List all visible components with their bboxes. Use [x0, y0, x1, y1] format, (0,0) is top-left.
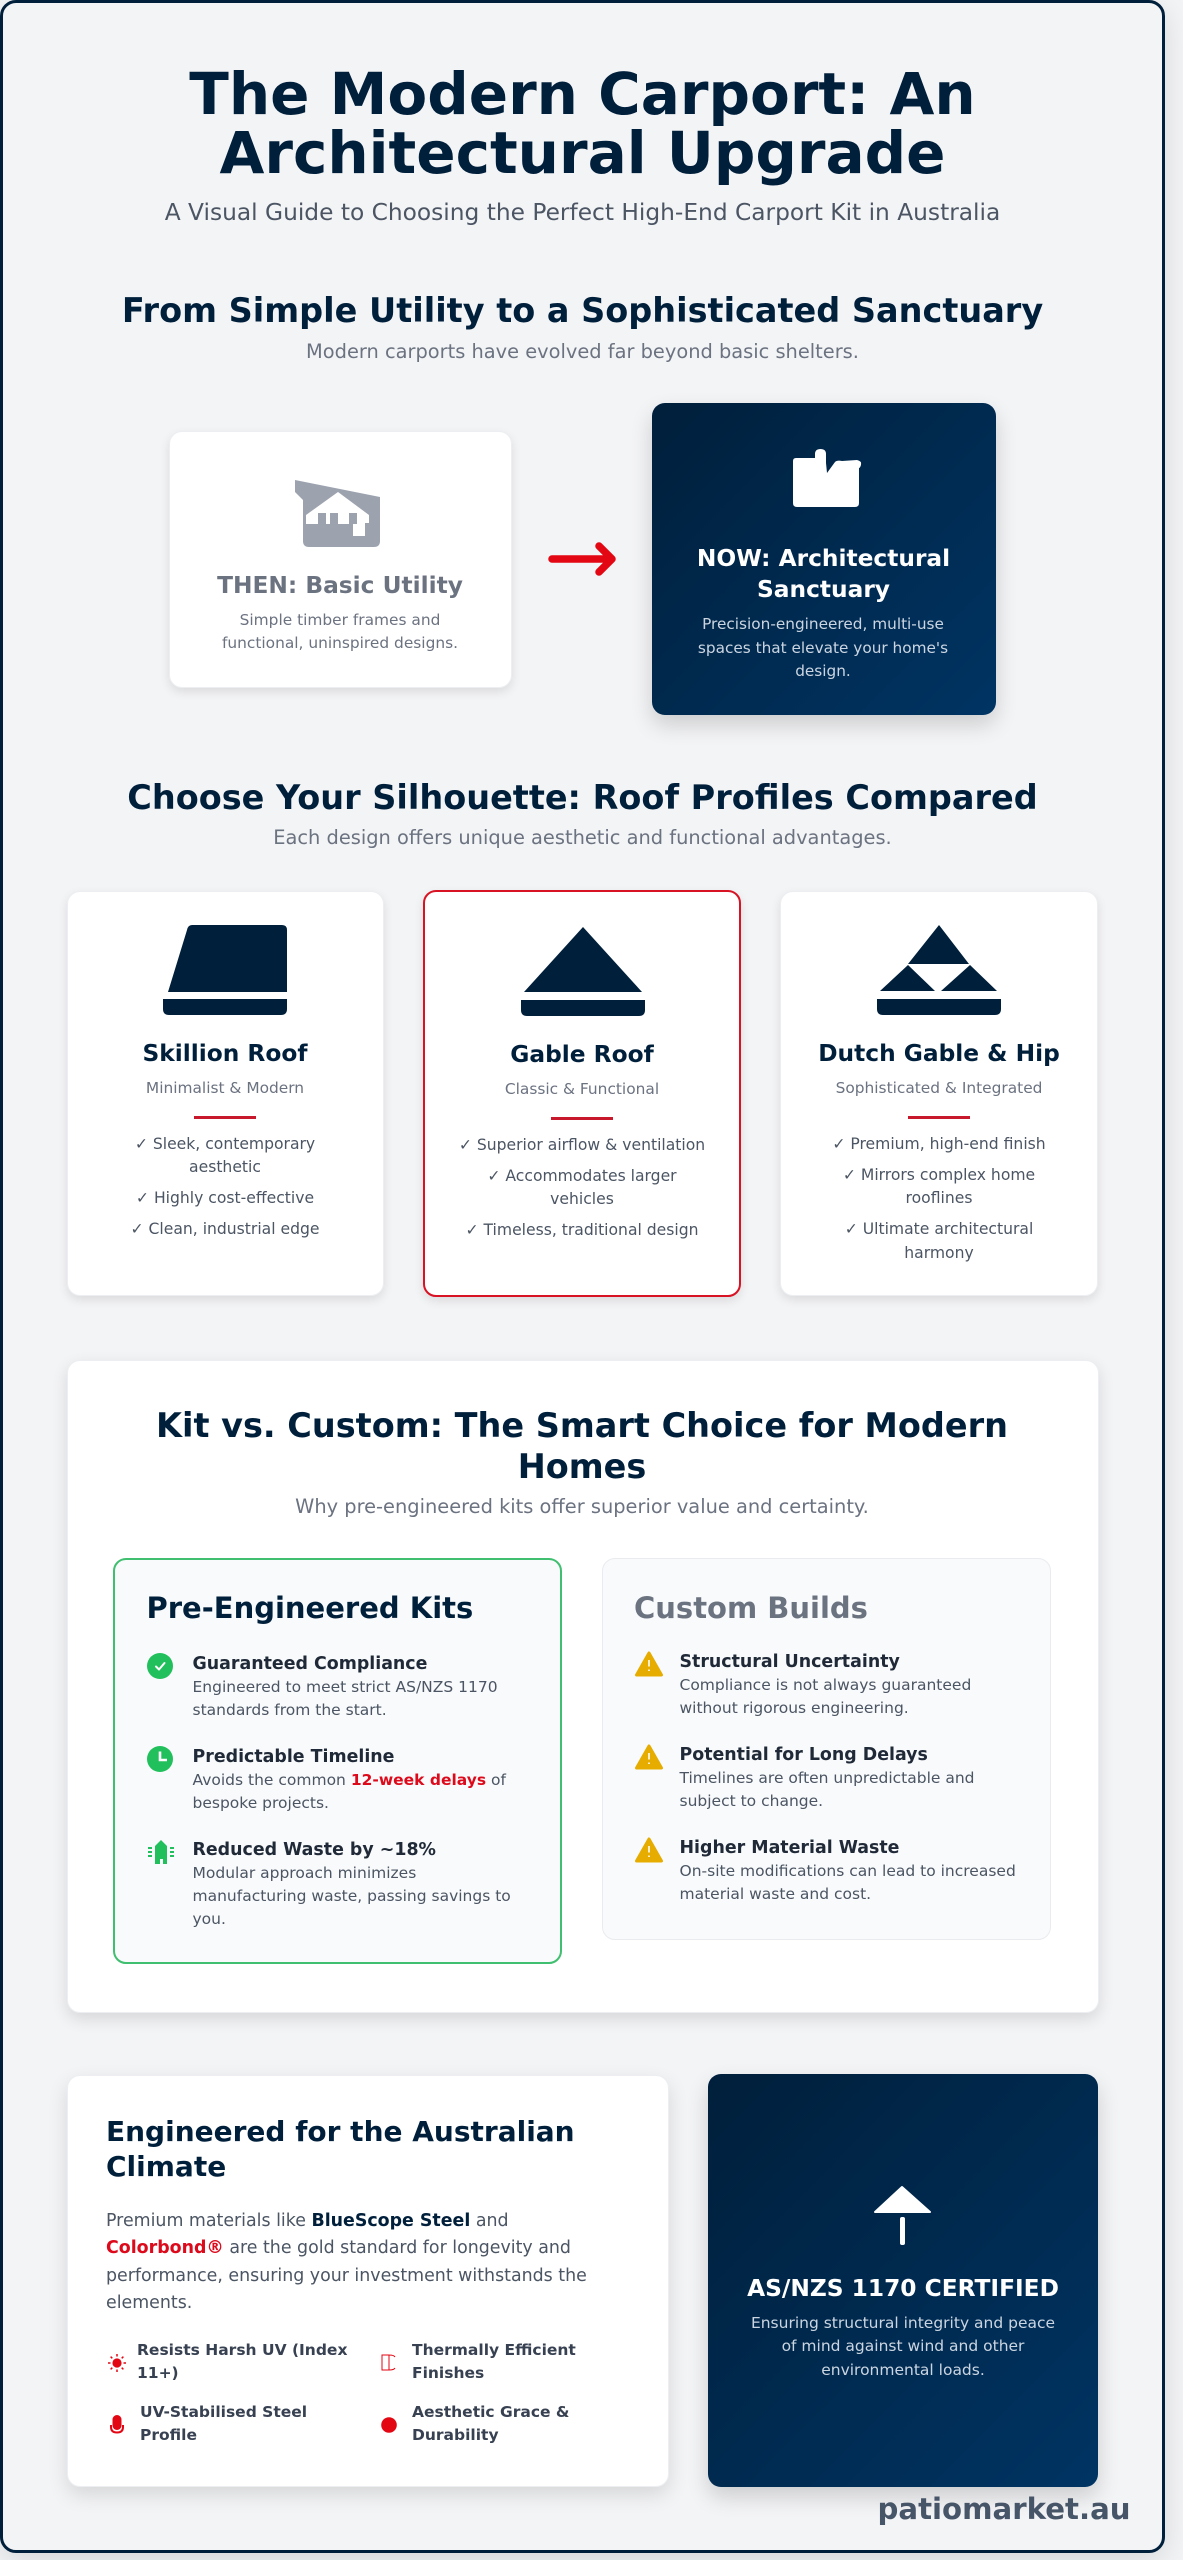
thermal text: Finishes: [412, 2364, 484, 2382]
steel text: Profile: [140, 2426, 197, 2444]
aesthetic text: Durability: [412, 2426, 499, 2444]
waste text: [192, 1864, 511, 1928]
certified description: environmental loads.: [821, 2361, 985, 2379]
gable tagline: Classic & Functional: [505, 1080, 659, 1098]
uncertainty title: Structural Uncertainty: [680, 1652, 900, 1672]
now description: spaces that elevate your home's: [698, 638, 948, 656]
gable title: Gable Roof: [510, 1041, 654, 1068]
skillion benefits: aesthetic ✓ Highly cost-effective ✓ Clean, industrial edge: [130, 1158, 320, 1238]
timeline title: Predictable Timeline: [192, 1746, 394, 1766]
uv text: 11+): [137, 2364, 179, 2382]
dutch benefits: ✓ Premium, high-end finish ✓ Mirrors complex home: [832, 1135, 1046, 1184]
divider: [194, 1116, 256, 1118]
delays text: subject to change.: [680, 1792, 823, 1810]
icon: warning: [635, 1744, 663, 1770]
delays text: Timelines are often unpredictable and: [680, 1768, 974, 1786]
item: waste: [148, 1840, 511, 1928]
dutch benefits: [832, 1135, 1046, 1262]
item: delays: [635, 1744, 974, 1810]
title: Architectural Upgrade: [219, 119, 946, 187]
aesthetic text: Aesthetic Grace &: [412, 2403, 569, 2421]
now description: design.: [795, 662, 851, 680]
waste text: you.: [192, 1910, 226, 1928]
feature: thermal: [382, 2341, 576, 2382]
waste text: Modular approach minimizes: [192, 1864, 416, 1882]
uncertainty text: without rigorous engineering.: [680, 1699, 909, 1717]
section heading: roofs: Choose Your Silhouette: Roof Profiles Compared: [127, 778, 1038, 816]
item: material waste: [635, 1837, 1016, 1903]
then description: functional, uninspired designs.: [222, 634, 458, 652]
climate heading: Climate: [106, 2150, 226, 2182]
dutch title: Dutch Gable & Hip: [818, 1040, 1060, 1067]
climate paragraph: performance, ensuring your investment withstands the: [106, 2266, 587, 2286]
material waste title: Higher Material Waste: [680, 1838, 899, 1858]
custom heading: Custom Builds: [634, 1591, 868, 1625]
divider: [551, 1117, 613, 1120]
icon: warning: [635, 1651, 663, 1676]
icon: gable: [521, 927, 645, 1016]
panel: then card: [168, 431, 512, 688]
panel: skillion roof: [66, 891, 384, 1296]
panel: certification: [708, 2074, 1098, 2487]
thermal text: [412, 2341, 576, 2382]
panel: custom builds: [602, 1558, 1050, 1940]
timeline text: Avoids the common 12-week delays of: [192, 1770, 506, 1788]
icon: basic shelter: [295, 480, 380, 547]
certified description: of mind against wind and other: [782, 2337, 1024, 2355]
icon: dutch gable: [877, 925, 1001, 1015]
compliance title: Guaranteed Compliance: [192, 1654, 427, 1674]
waste title: Reduced Waste by ~18%: [192, 1840, 436, 1860]
delays title: Potential for Long Delays: [680, 1744, 928, 1764]
timeline text: bespoke projects.: [192, 1794, 329, 1812]
steel text: [140, 2401, 307, 2448]
kit heading: Kit vs. Custom: The Smart Choice for Modern: [156, 1406, 1008, 1444]
compliance text: [192, 1678, 498, 1719]
dutch benefits: rooflines ✓ Ultimate architectural: [845, 1189, 1033, 1238]
then description: Simple timber frames and: [240, 611, 440, 629]
icon: warning: [635, 1837, 663, 1862]
subtitle: A Visual Guide to Choosing the Perfect High-End Carport Kit in Australia: [165, 199, 1000, 226]
title: [189, 60, 976, 187]
steel text: UV-Stabilised Steel: [140, 2403, 307, 2421]
feature: aesthetic: [378, 2400, 648, 2450]
feature: steel: [106, 2400, 366, 2450]
panel: dutch gable: [780, 891, 1098, 1296]
waste text: manufacturing waste, passing savings to: [192, 1887, 511, 1905]
gable benefits: ✓ Superior airflow & ventilation ✓ Accommodates larger: [459, 1136, 705, 1185]
panel: pre-engineered kits: [113, 1558, 562, 1964]
uv text: [137, 2341, 348, 2382]
item: uncertainty: [635, 1651, 971, 1717]
climate paragraph: [106, 2211, 587, 2313]
thermal text: Thermally Efficient: [412, 2341, 576, 2359]
dutch benefits: harmony: [904, 1244, 974, 1262]
material waste text: On-site modifications can lead to increased: [680, 1862, 1016, 1880]
then description: [222, 611, 458, 652]
compliance text: Engineered to meet strict AS/NZS 1170: [192, 1678, 498, 1696]
section subheading: evolution: Modern carports have evolved far beyond basic shelters.: [306, 340, 859, 363]
skillion tagline: Minimalist & Modern: [146, 1079, 304, 1097]
uncertainty text: Compliance is not always guaranteed: [680, 1676, 971, 1694]
divider: [908, 1116, 970, 1118]
certified description: [708, 2312, 1098, 2382]
pre-engineered heading: Pre-Engineered Kits: [146, 1591, 473, 1625]
kit heading: Homes: [518, 1446, 646, 1486]
dutch tagline: Sophisticated & Integrated: [836, 1079, 1042, 1097]
section subheading: roofs: Each design offers unique aesthetic and functional advantages.: [273, 826, 892, 849]
icon: thermal: [382, 2354, 396, 2370]
item: timeline: [147, 1746, 506, 1812]
skillion title: Skillion Roof: [142, 1040, 308, 1067]
title: The Modern Carport: An: [189, 60, 976, 128]
icon: modular house: [148, 1840, 174, 1864]
climate paragraph: Colorbond® are the gold standard for longevity and: [106, 2238, 571, 2258]
uv text: Resists Harsh UV (Index: [137, 2341, 347, 2359]
icon: sun: [108, 2354, 126, 2372]
climate paragraph: elements.: [106, 2293, 192, 2313]
icon: check: [147, 1653, 173, 1679]
skillion benefits: ✓ Sleek, contemporary: [135, 1135, 315, 1153]
icon: certified shelter: [873, 2185, 933, 2247]
icon: modern shelter: [793, 449, 862, 507]
section heading: evolution: From Simple Utility to a Sophisticated Sanctuary: [122, 291, 1043, 330]
panel: gable roof: [423, 890, 741, 1297]
now description: [698, 615, 948, 680]
certified description: Ensuring structural integrity and peace: [751, 2314, 1055, 2332]
now heading: [697, 545, 950, 603]
icon: microphone: [108, 2414, 126, 2436]
arrow: then to now: [548, 542, 616, 576]
item: compliance: [147, 1653, 498, 1719]
timeline text: [192, 1770, 506, 1812]
compliance text: standards from the start.: [192, 1701, 387, 1719]
material waste text: material waste and cost.: [680, 1885, 871, 1903]
panel: now card: [652, 403, 996, 715]
brand footer: patiomarket.au: [878, 2492, 1131, 2526]
kit heading: [156, 1406, 1008, 1486]
feature: uv: [108, 2341, 348, 2382]
gable benefits: vehicles ✓ Timeless, traditional design: [465, 1190, 699, 1239]
then heading: THEN: Basic Utility: [217, 572, 463, 599]
climate paragraph: Premium materials like BlueScope Steel and: [106, 2211, 509, 2231]
material waste text: [680, 1862, 1016, 1903]
delays text: [679, 1768, 974, 1810]
now heading: Sanctuary: [757, 576, 890, 603]
kit subheading: Why pre-engineered kits offer superior value and certainty.: [295, 1495, 869, 1518]
panel: australian climate: [66, 2075, 669, 2487]
climate heading: Engineered for the Australian: [106, 2114, 575, 2148]
aesthetic text: [412, 2401, 569, 2448]
now description: Precision-engineered, multi-use: [702, 615, 944, 633]
climate heading: [106, 2114, 575, 2182]
panel: kit vs custom: [66, 1360, 1098, 2013]
icon: dot: [380, 2416, 398, 2434]
icon: skillion: [163, 925, 287, 1015]
uncertainty text: [680, 1676, 971, 1717]
now heading: NOW: Architectural: [697, 545, 950, 572]
certified heading: AS/NZS 1170 CERTIFIED: [747, 2275, 1059, 2302]
gable benefits: [459, 1136, 705, 1239]
icon: clock: [147, 1746, 173, 1772]
